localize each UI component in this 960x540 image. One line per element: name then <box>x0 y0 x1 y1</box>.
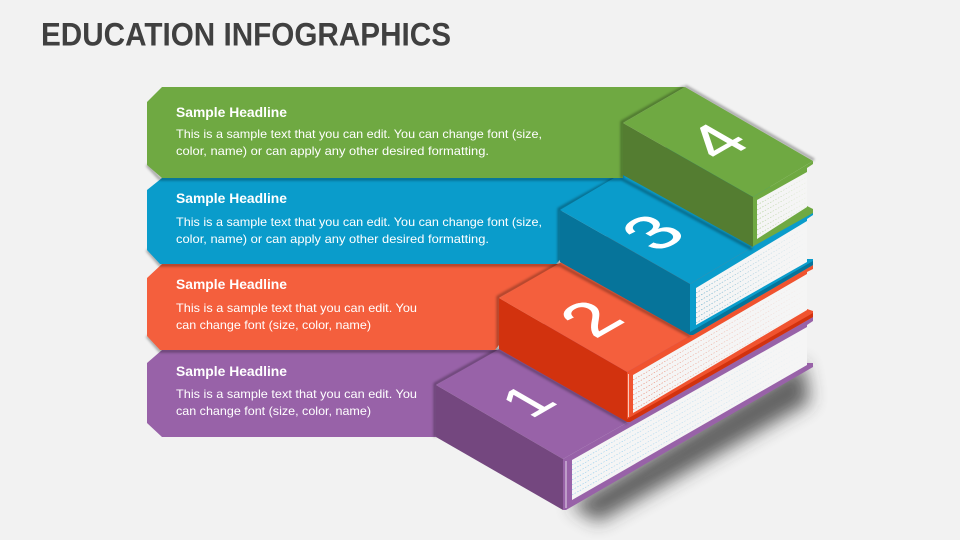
book 3 <box>560 137 813 335</box>
book 1 <box>436 243 813 510</box>
title: EDUCATION INFOGRAPHICS <box>41 16 451 52</box>
number 3: 3 <box>605 205 702 261</box>
banner 3 body text <box>176 215 542 246</box>
book 4 <box>623 87 813 248</box>
banner 1 body text: This is a sample text that you can edit. You <box>176 387 417 401</box>
number 1: 1 <box>486 377 570 426</box>
banner 1 body text <box>176 387 417 418</box>
step 3: blue banner and book <box>147 137 813 335</box>
step 4: green banner and book <box>147 87 813 248</box>
banner 4 shape <box>147 87 685 178</box>
banner 3 body text: This is a sample text that you can edit. You can change font (size, <box>176 215 542 229</box>
banner 1 headline: Sample Headline <box>176 363 287 379</box>
book 2 <box>499 191 813 422</box>
banner 3 body text: color, name) or can apply any other desired formatting. <box>176 232 489 246</box>
banner 4 body text: color, name) or can apply any other desired formatting. <box>176 144 489 158</box>
banner 4 body text <box>176 127 542 158</box>
banner 3 shape <box>147 178 622 264</box>
banner 2 headline: Sample Headline <box>176 276 287 292</box>
number 4: 4 <box>669 114 766 170</box>
banner 3 headline: Sample Headline <box>176 190 287 206</box>
number 2: 2 <box>543 291 640 347</box>
step 2: orange banner and book <box>147 191 813 422</box>
banner 1 shape <box>147 350 499 437</box>
banner 2 body text <box>176 301 417 332</box>
banner 1 body text: can change font (size, color, name) <box>176 404 371 418</box>
banner 4 body text: This is a sample text that you can edit. You can change font (size, <box>176 127 542 141</box>
banner 2 shape <box>147 264 560 350</box>
banner 4 headline: Sample Headline <box>176 104 287 120</box>
step 1: purple banner and book <box>147 243 813 510</box>
banner 2 body text: This is a sample text that you can edit. You <box>176 301 417 315</box>
floor shadow under the book stack <box>570 362 810 522</box>
banner 2 body text: can change font (size, color, name) <box>176 318 371 332</box>
